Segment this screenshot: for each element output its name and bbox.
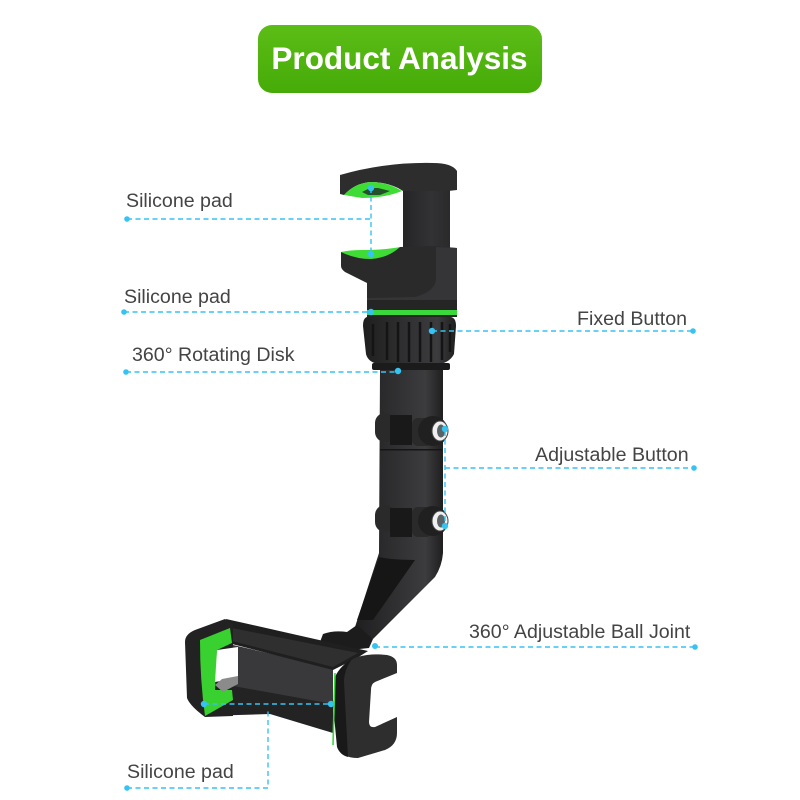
collar ring with green stripe	[367, 300, 457, 317]
label: adjustable button	[442, 426, 697, 529]
label: silicone pad (top)	[124, 185, 374, 257]
label: fixed button: Fixed Button	[577, 308, 687, 330]
label: silicone pad (bottom)	[124, 701, 334, 791]
product: phone mount	[185, 163, 457, 758]
right end block	[335, 654, 397, 758]
holder back wall	[233, 645, 333, 706]
label: 360 rotating disk: 360° Rotating Disk	[132, 344, 295, 366]
label: silicone pad (bottom): Silicone pad	[127, 761, 234, 783]
label: fixed button	[429, 308, 696, 334]
window	[215, 647, 238, 682]
label: 360 adjustable ball joint: 360° Adjustable Ball Joint	[469, 621, 691, 643]
top clamp	[340, 163, 457, 307]
adjustable arm	[355, 370, 448, 639]
lower hinge	[375, 505, 432, 537]
title badge	[258, 25, 542, 93]
label: 360 rotating disk	[123, 344, 401, 375]
ball joint	[320, 625, 373, 650]
label: adjustable button: Adjustable Button	[535, 444, 689, 466]
green pad	[200, 628, 233, 716]
label: silicone pad (ring)	[121, 286, 374, 315]
holder bottom wall	[205, 686, 333, 733]
lower button	[418, 506, 448, 536]
label: 360 adjustable ball joint	[372, 621, 698, 650]
holder top wall	[226, 619, 368, 670]
label: silicone pad (top): Silicone pad	[126, 190, 233, 212]
knurled rotating knob	[363, 317, 456, 370]
left frame	[185, 619, 233, 717]
bottom phone holder	[185, 619, 397, 758]
upper hinge	[375, 413, 432, 446]
title badge: Product Analysis	[271, 40, 528, 76]
upper button	[418, 416, 448, 446]
label: silicone pad (ring): Silicone pad	[124, 286, 231, 308]
